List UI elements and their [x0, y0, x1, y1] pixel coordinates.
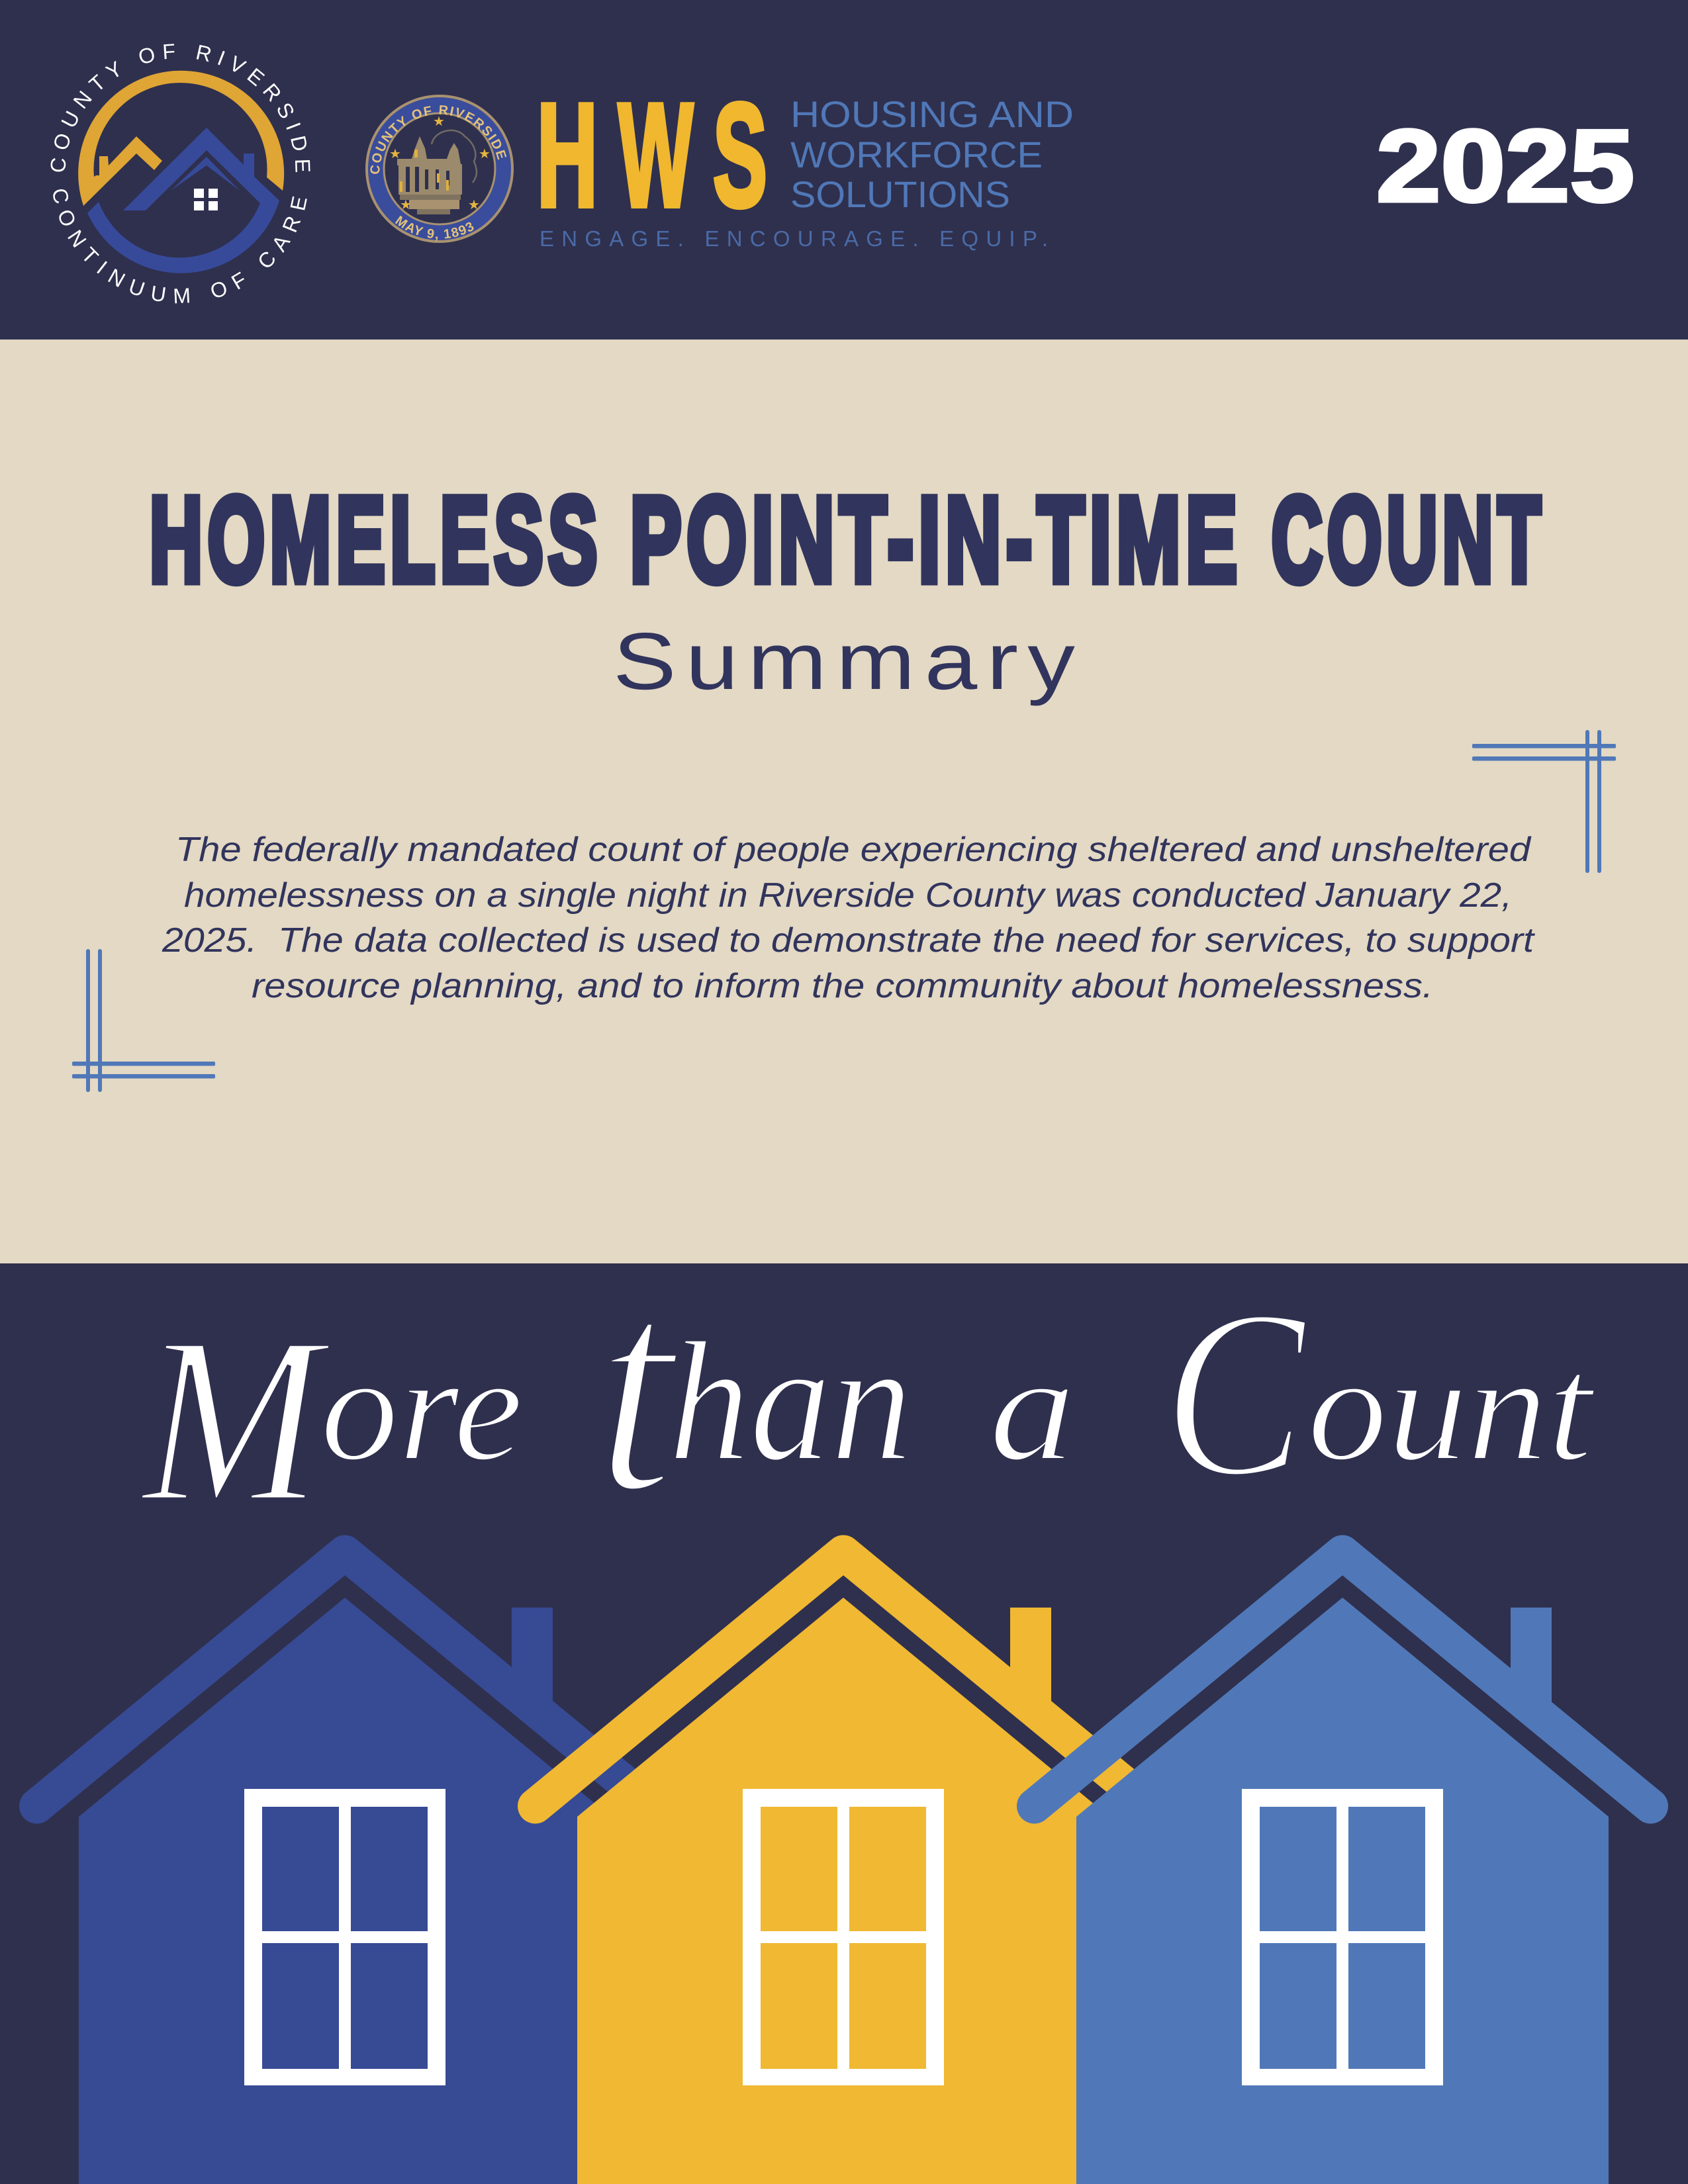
logo window: [194, 189, 218, 210]
seal building highlights: [400, 150, 449, 192]
light blue house roof: [1034, 1553, 1651, 1806]
subtitle: Summary: [613, 616, 1084, 706]
title: [150, 472, 1546, 607]
script heading: ount: [1307, 1324, 1595, 1492]
seal stars: ★: [389, 147, 401, 161]
light blue house body: [1076, 1598, 1609, 2184]
icon: County of Riverside seal: [365, 95, 514, 243]
light blue house window: [1242, 1789, 1443, 2085]
script heading: t: [596, 1224, 684, 1554]
house: dark blue: [37, 1553, 653, 2184]
seal stars: ★: [479, 147, 491, 161]
title: POINT-IN-TIME: [630, 472, 1243, 607]
seal stars: ★: [400, 198, 412, 212]
text block: description: The federally mandated count of people experiencing sheltered and unsheltered: [175, 831, 1532, 869]
seal stars: ★: [433, 114, 445, 129]
panel: lower band: [0, 1224, 1688, 2184]
seal inner disc: [384, 113, 495, 224]
year: 2025: [1376, 109, 1634, 223]
Housing and Workforce Solutions: WORKFORCE: [790, 134, 1043, 175]
gold house chimney: [1010, 1608, 1051, 1723]
gold house window: [743, 1789, 944, 2085]
text block: description: [162, 831, 1536, 1005]
light blue house chimney: [1511, 1608, 1552, 1723]
dark blue house roof: [37, 1553, 653, 1806]
seal ring: [367, 96, 512, 242]
text block: description: homelessness on a single night in Riverside County was conducted January 22,: [184, 876, 1512, 915]
logo ring text bottom: CONTINUUM OF CARE: [53, 189, 307, 303]
dark blue house window: [244, 1789, 445, 2085]
logo roof chevron: [171, 157, 240, 191]
HWS letters: W: [618, 73, 693, 238]
seal building windows: [406, 167, 449, 192]
gold house roof: [535, 1553, 1152, 1806]
seal stars: [389, 114, 491, 212]
HWS letters: H: [537, 73, 598, 238]
script heading: [139, 1224, 1595, 1554]
gold house body: [577, 1598, 1109, 2184]
seal ring text bottom: MAY 9, 1893: [395, 216, 474, 241]
corner bracket: bottom left: [72, 949, 215, 1092]
logo gold arc and small house: [78, 71, 284, 206]
seal ring text top: COUNTY OF RIVERSIDE: [370, 105, 507, 174]
title: HOMELESS: [150, 472, 602, 607]
script heading: a: [989, 1324, 1076, 1492]
icon: County of Riverside Continuum of Care logo: [50, 44, 310, 303]
logo: HWS wordmark: [537, 73, 1074, 251]
logo blue arc and large house: [87, 128, 279, 273]
HWS letters: [537, 73, 767, 238]
Housing and Workforce Solutions: [790, 93, 1074, 215]
Housing and Workforce Solutions: HOUSING AND: [790, 93, 1074, 135]
corner bracket: top right: [1472, 730, 1616, 873]
script heading: han: [669, 1306, 912, 1497]
Housing and Workforce Solutions: SOLUTIONS: [790, 173, 1010, 215]
script heading: ore: [320, 1324, 523, 1492]
dark blue house body: [79, 1598, 611, 2184]
panel: header band: [50, 44, 1634, 303]
text block: description: resource planning, and to inform the community about homelessness.: [252, 967, 1433, 1005]
house: light blue: [1034, 1553, 1651, 2184]
seal tree outline: [432, 130, 477, 183]
house: gold: [535, 1553, 1152, 2184]
script heading: M: [139, 1287, 334, 1551]
script heading: C: [1163, 1259, 1310, 1527]
logo ring text top: COUNTY OF RIVERSIDE: [50, 44, 310, 172]
seal stars: ★: [468, 198, 480, 212]
panel: summary band: [0, 340, 1688, 1263]
HWS letters: S: [713, 73, 767, 238]
seal building: [397, 136, 462, 214]
text block: description: 2025. The data collected is used to demonstrate the need for services, to support: [162, 921, 1536, 960]
tagline: ENGAGE. ENCOURAGE. EQUIP.: [539, 226, 1048, 251]
dark blue house chimney: [512, 1608, 553, 1723]
